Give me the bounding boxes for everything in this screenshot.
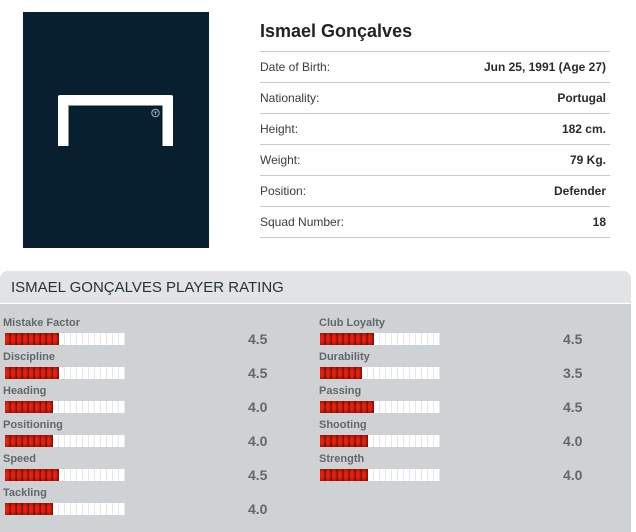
rating: Tackling: Tackling <box>3 487 47 499</box>
rating: Shooting: Shooting <box>319 419 367 431</box>
image: placeholder logo panel <box>23 12 209 248</box>
rating: Tackling: 4.0 <box>248 501 267 517</box>
rating: Positioning <box>3 419 267 449</box>
player name heading: Ismael Gonçalves <box>260 21 412 41</box>
rating: Positioning: 4.0 <box>248 433 267 449</box>
rating: Shooting: 4.0 <box>563 433 582 449</box>
player details table: Squad Number: <box>260 215 344 229</box>
rating: Positioning: Positioning <box>3 419 63 431</box>
rating panel heading: ISMAEL GONÇALVES PLAYER RATING <box>11 279 284 296</box>
player details table: Weight: <box>260 153 300 167</box>
rating: Strength: 4.0 <box>563 467 582 483</box>
player details table: Defender <box>554 184 606 198</box>
player details table: Nationality: <box>260 91 319 105</box>
rating: Discipline: 4.5 <box>248 365 267 381</box>
rating: Tackling <box>3 487 267 517</box>
rating: Club Loyalty <box>319 317 582 347</box>
panel: player rating <box>0 271 631 532</box>
player details table: 182 cm. <box>562 122 606 136</box>
player details table: Portugal <box>557 91 606 105</box>
player details table: Height: <box>260 122 298 136</box>
rating: Passing: Passing <box>319 385 361 397</box>
rating: Speed: 4.5 <box>248 467 267 483</box>
rating: Strength <box>319 453 582 483</box>
player details table: 18 <box>593 215 606 229</box>
rating: Mistake Factor: 4.5 <box>248 331 267 347</box>
rating panel heading <box>0 271 631 304</box>
player details table: Jun 25, 1991 (Age 27) <box>484 60 606 74</box>
rating: Passing <box>319 385 582 415</box>
rating: Club Loyalty: Club Loyalty <box>319 317 385 329</box>
rating: Mistake Factor: Mistake Factor <box>3 317 80 329</box>
rating: Durability: 3.5 <box>563 365 582 381</box>
rating: Durability <box>319 351 582 381</box>
rating: Club Loyalty: 4.5 <box>563 331 582 347</box>
player details table: Date of Birth: <box>260 60 330 74</box>
rating: Heading <box>3 385 267 415</box>
rating: Discipline <box>3 351 267 381</box>
rating: Heading: 4.0 <box>248 399 267 415</box>
player details table: 79 Kg. <box>570 153 606 167</box>
rating: Speed <box>3 453 267 483</box>
rating: Shooting <box>319 419 582 449</box>
rating: Discipline: Discipline <box>3 351 55 363</box>
rating: Mistake Factor <box>3 317 267 347</box>
icon: goal frame logo <box>58 95 173 146</box>
player details table <box>260 51 610 238</box>
rating: Strength: Strength <box>319 453 364 465</box>
rating: Speed: Speed <box>3 453 36 465</box>
rating: Passing: 4.5 <box>563 399 582 415</box>
rating: Durability: Durability <box>319 351 370 363</box>
player details table: Position: <box>260 184 306 198</box>
rating: Heading: Heading <box>3 385 46 397</box>
